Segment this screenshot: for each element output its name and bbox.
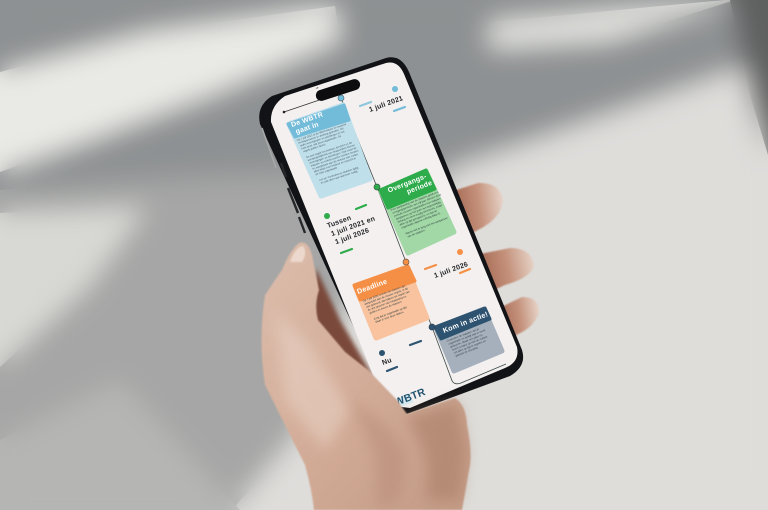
panel: Overgangsperiode <box>380 170 454 253</box>
date: Tussen 1 juli 2021 en 1 juli 2026: Tussen <box>326 215 352 230</box>
date: Nu <box>379 341 421 371</box>
hand web shadow behind phone <box>310 268 374 378</box>
dynamic island <box>314 78 362 102</box>
body text: neem contact op met de notaris <box>451 334 488 352</box>
body text: gelden ze boven de statuten. <box>369 299 403 315</box>
heading: gaat in <box>295 121 320 136</box>
timeline line <box>341 98 506 384</box>
date: Tussen 1 juli 2021 en 1 juli 2026: 1 juli 2021 en <box>330 216 376 238</box>
top label at notch: Digitale checklist <box>308 69 363 92</box>
hand: thumb and palm in front <box>262 242 471 510</box>
date: Nu: Nu <box>381 357 393 367</box>
body text: en pas deze aan wanneer nodig. <box>320 169 359 185</box>
date: Tussen 1 juli 2021 en 1 juli 2026 <box>324 205 379 253</box>
fingers behind phone <box>450 183 539 340</box>
body text: gebeuren. Maak een plan en <box>449 333 483 349</box>
body text: om alles op tijd te regelen en <box>453 339 487 355</box>
date: 1 juli 2026: 1 juli 2026 <box>433 261 469 280</box>
timeline dots <box>338 95 435 330</box>
phone body <box>259 57 523 414</box>
body text: verenigingen en stichtingen. Ook moet de <box>309 146 357 165</box>
thumb nail <box>290 246 305 262</box>
body text: organisatie daarna volledig klaar is. <box>401 211 442 230</box>
body text: en aangepast aan de nieuwe wet, zodat <box>312 152 358 171</box>
panel: Kom in actie <box>435 308 502 371</box>
body text: aanpassen op het punt van tegenstrijdig <box>395 200 442 221</box>
shadow under phone on palm <box>405 402 466 500</box>
body text: statuten op enkele punten worden herzien <box>310 148 359 168</box>
side buttons <box>281 163 305 233</box>
body text: De wet regelt het bestuur, toezicht en de <box>305 140 353 159</box>
panel: Deadline <box>354 266 427 338</box>
body text: gebruik de checklist. <box>455 345 479 358</box>
body text: periode moeten organisaties hun statuten <box>393 196 442 218</box>
body text: aangepast aan de nieuwe regels. Is dit <box>364 286 409 306</box>
body text: van de statuten. <box>407 228 426 239</box>
body text: alles op tijd geregeld is, en dat de <box>399 208 438 227</box>
date: 1 juli 2021 <box>360 86 405 114</box>
body text: de hele organisatie. <box>315 165 339 176</box>
body text: Wacht niet te lang met het aanpassen <box>405 216 449 236</box>
body text: overgangsperiode van vijf jaar. Binnen deze <box>392 192 442 215</box>
heading: Overgangs- <box>387 173 428 195</box>
phone screen <box>271 62 518 408</box>
date: 1 juli 2026 <box>425 249 470 280</box>
body text: Op 1 juli 2021 is de Wet bestuur en toezicht <box>296 123 347 142</box>
body text: belang en meervoudig stemrecht, zodat <box>397 203 443 224</box>
palm fold shading <box>345 400 406 505</box>
timeline content on screen <box>283 86 506 409</box>
body text: regels gelden direct. <box>302 142 327 153</box>
panel: De WBTR gaat in <box>288 105 370 196</box>
body text: hele land, ook jouw organisatie. De <box>301 134 342 151</box>
body text: Zorg dat je organisatie op tijd <box>373 305 408 321</box>
body text: raakt verenigingen en stichtingen in het <box>299 129 345 148</box>
date: 1 juli 2021: 1 juli 2021 <box>368 95 404 114</box>
body text: organisatie en bekijk wat er moet <box>448 328 486 346</box>
body text: Voor aanpassing van de statuten geldt een <box>390 191 439 212</box>
metal edge highlight <box>262 128 276 168</box>
body text: Op 1 juli 2026 moeten de statuten zijn <box>362 285 406 303</box>
body text: niet gebeurd, dan blijven de regels van <box>365 289 411 309</box>
heading: Deadline <box>356 277 388 296</box>
heading: De WBTR <box>290 111 324 129</box>
body text: de wet gewoon van toepassing en <box>367 294 407 312</box>
logo: WBTR: WBTR <box>393 386 427 409</box>
body text: rechtspersonen in werking getreden. Dit <box>298 126 344 145</box>
top bar with arrow <box>283 93 340 113</box>
heading: Kom in actie! <box>441 309 489 335</box>
body text: Let op: Controleer je statuten tijdig <box>319 165 359 182</box>
palm highlight <box>275 310 350 450</box>
date: Tussen 1 juli 2021 en 1 juli 2026: 1 juli 2026 <box>334 227 370 246</box>
body text: klaar is voor deze datum. <box>375 310 405 324</box>
body text: alles klopt voor bestuur en toezicht in <box>313 156 357 173</box>
body text: aansprakelijkheid van bestuurders binnen <box>307 143 356 162</box>
heading: periode <box>406 180 433 196</box>
body text: Controleer de statuten van je <box>446 328 480 343</box>
